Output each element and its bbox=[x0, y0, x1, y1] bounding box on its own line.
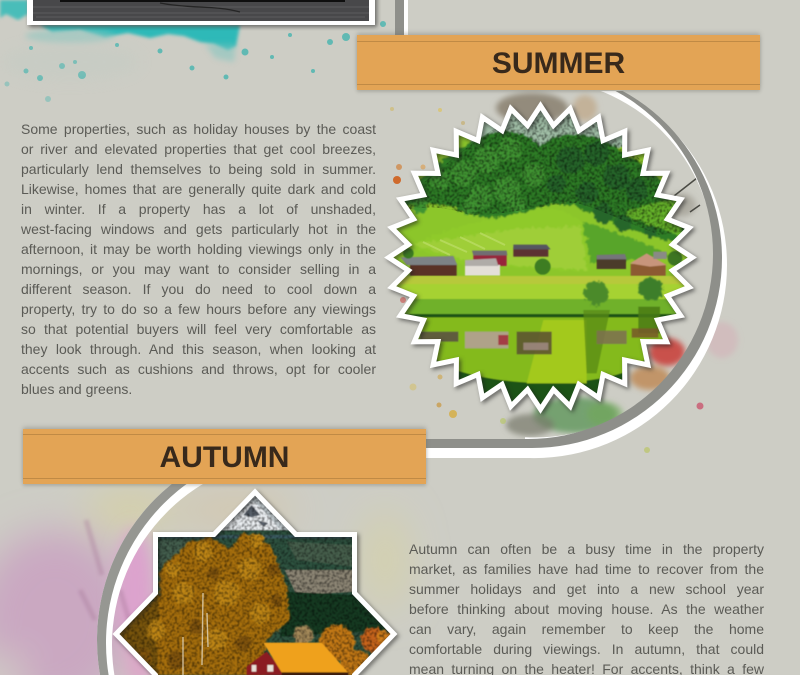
text block: summer: blues and greens. bbox=[21, 381, 132, 397]
banner: autumn bbox=[23, 429, 426, 484]
text block: summer: in winter. If a property has a lot of unshaded, bbox=[21, 201, 376, 217]
text block: autumn: summer holidays and get into a new school year bbox=[409, 581, 764, 597]
landscape: mountain and hills bbox=[146, 496, 390, 675]
forest leaf texture bbox=[407, 110, 684, 235]
watercolor: summer splashes bbox=[390, 93, 738, 453]
text block: summer bbox=[21, 121, 376, 397]
watercolor: teal splash bbox=[0, 0, 386, 102]
summer star photo bbox=[384, 101, 700, 416]
text block: summer: property, try to do so a few hours before any viewings bbox=[21, 301, 376, 317]
landscape: hillside and forest bbox=[393, 110, 688, 277]
text block: summer: so that potential buyers will feel very comfortable as bbox=[21, 321, 376, 337]
shore fields and lake bbox=[396, 275, 684, 404]
banner: autumn: AUTUMN bbox=[160, 441, 289, 474]
text block: autumn: Autumn can often be a busy time in the property bbox=[409, 541, 764, 557]
summer arc bar above banner bbox=[395, 0, 408, 36]
text block: autumn: before thinking about moving house. As the weather bbox=[409, 601, 764, 617]
text block: summer: different season. If you do need to cool down a bbox=[21, 281, 376, 297]
autumn star photo bbox=[112, 488, 401, 675]
red barn bbox=[247, 643, 348, 675]
text block: summer: Some properties, such as holiday houses by the coast bbox=[21, 121, 376, 137]
top photo frame bbox=[27, 0, 375, 25]
watercolor: autumn wash bbox=[0, 496, 407, 675]
birch trunks bbox=[183, 593, 208, 675]
text block: autumn: can vary, again remember to keep the home bbox=[409, 621, 764, 637]
banner: summer bbox=[357, 35, 760, 90]
farm houses bbox=[401, 245, 682, 276]
text block: autumn: comfortable during viewings. In autumn, that could bbox=[409, 641, 764, 657]
shore trees bbox=[584, 277, 663, 305]
leaf and hill texture bbox=[113, 535, 398, 675]
golden trees and bushes bbox=[113, 532, 390, 675]
text block: summer: accents such as cushions and throws, opt for cooler bbox=[21, 361, 376, 377]
text block: autumn bbox=[409, 541, 764, 675]
banner: summer: SUMMER bbox=[492, 47, 625, 80]
text block: summer: or river and elevated properties that get cool breezes, bbox=[21, 141, 376, 157]
text block: summer: they look through. And this season, when looking at bbox=[21, 341, 376, 357]
text block: summer: particularly lend themselves to being sold in summer. bbox=[21, 161, 376, 177]
text block: summer: Likewise, homes that are generally quite dark and cold bbox=[21, 181, 376, 197]
text block: autumn: market, as families have had time to recover from the bbox=[409, 561, 764, 577]
autumn arc bbox=[97, 484, 202, 675]
text block: summer: west-facing windows and gets particularly hot in the bbox=[21, 221, 376, 237]
text block: summer: afternoon, it may be worth holding viewings only in the bbox=[21, 241, 376, 257]
summer arc bbox=[426, 91, 727, 458]
hay stripes bbox=[423, 233, 505, 255]
text block: summer: mornings, or you may want to consider selling in a bbox=[21, 261, 376, 277]
